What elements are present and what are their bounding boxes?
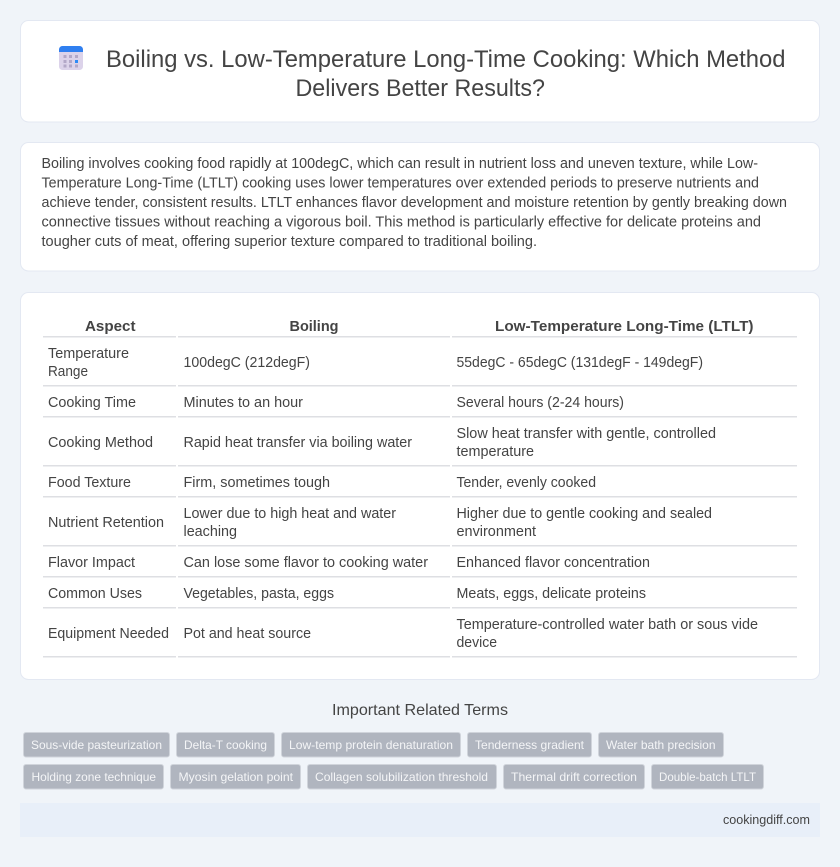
row: equipment needed bbox=[43, 617, 797, 658]
title heading: Delivers Better Results? bbox=[296, 75, 545, 102]
panel: introduction bbox=[20, 142, 820, 271]
row: common uses: Vegetables, pasta, eggs bbox=[184, 586, 334, 602]
intro paragraph: Boiling involves cooking food rapidly at 100degC, which can result in nutrient loss and uneven texture, while Low- bbox=[42, 156, 758, 172]
tag: thermal drift correction: Thermal drift correction bbox=[511, 770, 637, 784]
row: equipment needed: device bbox=[456, 635, 497, 651]
tag: double-batch ltlt: Double-batch LTLT bbox=[659, 770, 757, 784]
tag: collagen solubilization threshold bbox=[308, 764, 496, 789]
table header row bbox=[43, 319, 797, 338]
row: nutrient retention: leaching bbox=[184, 524, 237, 540]
row: cooking method: Slow heat transfer with gentle, controlled bbox=[456, 426, 716, 442]
row: cooking method bbox=[43, 426, 797, 466]
intro paragraph bbox=[42, 156, 787, 250]
tag: tenderness gradient bbox=[468, 732, 592, 757]
tag: sous-vide pasteurization: Sous-vide pasteurization bbox=[31, 738, 162, 752]
row: equipment needed: Equipment Needed bbox=[48, 626, 169, 642]
row: food texture: Food Texture bbox=[48, 475, 131, 491]
row: equipment needed: Pot and heat source bbox=[184, 626, 311, 642]
icon: calendar bbox=[59, 46, 83, 70]
row: food texture: Firm, sometimes tough bbox=[184, 475, 330, 491]
row: flavor impact: Can lose some flavor to cooking water bbox=[184, 555, 428, 571]
row: common uses: Meats, eggs, delicate proteins bbox=[456, 586, 646, 602]
tag: sous-vide pasteurization bbox=[24, 732, 170, 757]
tag: delta-t cooking: Delta-T cooking bbox=[184, 738, 267, 752]
row: common uses bbox=[43, 586, 797, 608]
title heading bbox=[106, 46, 786, 102]
row: nutrient retention: Nutrient Retention bbox=[48, 515, 164, 531]
row: nutrient retention: Lower due to high heat and water bbox=[184, 506, 396, 522]
row: food texture: Tender, evenly cooked bbox=[456, 475, 596, 491]
title heading: Boiling vs. Low-Temperature Long-Time Cooking: Which Method bbox=[106, 46, 786, 73]
tag: collagen solubilization threshold: Collagen solubilization threshold bbox=[315, 770, 488, 784]
row: equipment needed: Temperature-controlled water bath or sous vide bbox=[456, 617, 758, 633]
row: cooking time: Several hours (2-24 hours) bbox=[456, 395, 624, 411]
row: cooking time bbox=[43, 395, 797, 418]
table header row: Aspect bbox=[85, 319, 136, 335]
row: cooking method: temperature bbox=[456, 444, 534, 460]
related terms tags bbox=[24, 732, 764, 789]
row: food texture bbox=[43, 475, 797, 498]
row: temperature range: Range bbox=[48, 364, 88, 380]
tag: low-temp protein denaturation bbox=[282, 732, 460, 757]
row: flavor impact: Flavor Impact bbox=[48, 555, 135, 571]
panel: comparison table bbox=[20, 292, 820, 680]
row: temperature range: 55degC - 65degC (131degF - 149degF) bbox=[456, 355, 703, 371]
row: nutrient retention: Higher due to gentle cooking and sealed bbox=[456, 506, 712, 522]
tag: delta-t cooking bbox=[176, 732, 274, 757]
intro paragraph: tougher cuts of meat, offering superior texture compared to traditional boiling. bbox=[42, 234, 537, 250]
tag: double-batch ltlt bbox=[652, 764, 764, 789]
intro paragraph: achieve tender, consistent results. LTLT enhances flavor development and moisture retention by gently breaking down bbox=[42, 195, 787, 211]
row: temperature range: Temperature bbox=[48, 346, 129, 362]
intro paragraph: Temperature Long-Time (LTLT) cooking uses lower temperatures over extended periods to preserve nutrients and bbox=[42, 176, 759, 192]
table header row: Boiling bbox=[290, 319, 338, 335]
table header row: Low-Temperature Long-Time (LTLT) bbox=[495, 319, 754, 335]
intro paragraph: connective tissues without reaching a vigorous boil. This method is particularly effective for delicate proteins and bbox=[42, 214, 761, 230]
tag: tenderness gradient: Tenderness gradient bbox=[475, 738, 585, 752]
row: flavor impact bbox=[43, 555, 797, 578]
tag: myosin gelation point bbox=[170, 764, 300, 789]
tag: holding zone technique bbox=[24, 764, 164, 789]
tag: low-temp protein denaturation: Low-temp protein denaturation bbox=[289, 738, 453, 752]
tag: water bath precision: Water bath precision bbox=[606, 738, 716, 752]
row: cooking method: Cooking Method bbox=[48, 435, 153, 451]
row: nutrient retention bbox=[43, 506, 797, 546]
tag: water bath precision bbox=[598, 732, 724, 757]
tag: holding zone technique: Holding zone technique bbox=[32, 770, 156, 784]
related terms heading: Important Related Terms bbox=[332, 702, 508, 719]
row: cooking time: Minutes to an hour bbox=[184, 395, 303, 411]
row: cooking method: Rapid heat transfer via boiling water bbox=[184, 435, 412, 451]
tag: thermal drift correction bbox=[504, 764, 644, 789]
panel: title card bbox=[20, 20, 820, 122]
row: nutrient retention: environment bbox=[456, 524, 536, 540]
row: temperature range bbox=[43, 346, 797, 386]
row: temperature range: 100degC (212degF) bbox=[184, 355, 310, 371]
row: cooking time: Cooking Time bbox=[48, 395, 136, 411]
tag: myosin gelation point: Myosin gelation point bbox=[178, 770, 294, 784]
footer bar bbox=[20, 803, 820, 837]
row: flavor impact: Enhanced flavor concentration bbox=[456, 555, 650, 571]
row: common uses: Common Uses bbox=[48, 586, 142, 602]
footer bar: cookingdiff.com bbox=[723, 813, 810, 827]
